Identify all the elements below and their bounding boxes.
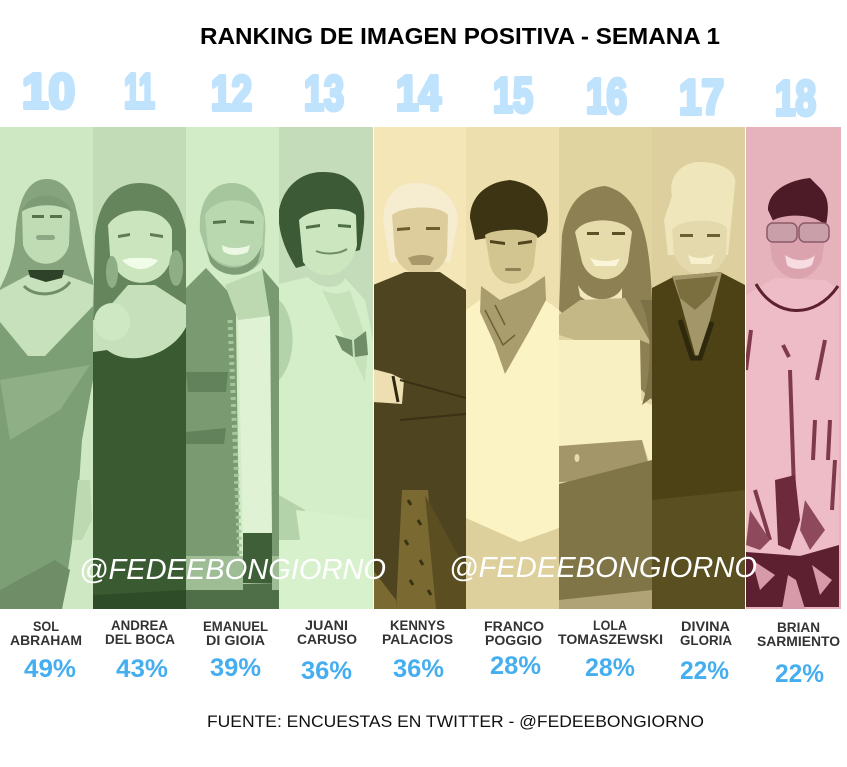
source footer: FUENTE: ENCUESTAS EN TWITTER - @FEDEEBONGIORNO	[207, 712, 704, 731]
participant names: TOMASZEWSKI	[558, 632, 663, 647]
panel: Lola Tomaszewski portrait	[559, 127, 655, 609]
percentages: 28%	[585, 654, 635, 682]
percentages: 36%	[301, 657, 352, 685]
rank numbers: 16	[586, 70, 627, 124]
panel: Emanuel di Gioia portrait	[186, 127, 279, 609]
participant names: SARMIENTO	[757, 634, 840, 649]
participant names: GLORIA	[680, 633, 732, 648]
participant names: DEL BOCA	[105, 632, 175, 647]
title: RANKING DE IMAGEN POSITIVA - SEMANA 1	[200, 23, 720, 49]
participant names: DIVINA	[681, 619, 730, 634]
rank numbers: 13	[304, 67, 344, 121]
watermark left: @FEDEEBONGIORNO	[79, 554, 386, 586]
panel: Divina Gloria portrait	[652, 127, 745, 609]
percentages: 22%	[680, 657, 729, 685]
percentages: 39%	[210, 654, 261, 682]
percentages: 36%	[393, 655, 444, 683]
rank numbers: 18	[775, 72, 816, 126]
participant names: PALACIOS	[382, 632, 453, 647]
panel: Kennys Palacios portrait	[373, 127, 466, 609]
participant names: EMANUEL	[203, 619, 268, 634]
watermark right: @FEDEEBONGIORNO	[449, 552, 757, 584]
panel: Franco Poggio portrait	[466, 127, 559, 609]
participant names: JUANI	[305, 618, 348, 633]
participant names: DI GIOIA	[206, 633, 265, 648]
icon: butterfly tattoo	[335, 331, 368, 357]
participant names: ANDREA	[111, 618, 168, 633]
rank numbers	[22, 65, 816, 126]
rank numbers: 14	[396, 67, 441, 121]
participant names: CARUSO	[297, 632, 357, 647]
participant names: FRANCO	[484, 619, 544, 634]
panel: Andrea del Boca portrait	[93, 127, 186, 609]
percentages: 43%	[116, 655, 168, 683]
participant names: ABRAHAM	[10, 633, 82, 648]
rank numbers: 12	[211, 67, 252, 121]
percentages: 28%	[490, 652, 541, 680]
rank numbers: 15	[493, 69, 533, 123]
participant names	[10, 618, 840, 649]
participant names: BRIAN	[777, 620, 820, 635]
panel: Sol Abraham portrait	[0, 127, 93, 609]
rank numbers: 10	[22, 65, 75, 119]
rank numbers: 11	[124, 65, 155, 119]
participant names: KENNYS	[390, 618, 445, 633]
rank numbers: 17	[679, 71, 724, 125]
panel: Brian Sarmiento portrait	[746, 127, 841, 609]
participant names: POGGIO	[485, 633, 542, 648]
panel: Juani Caruso portrait	[279, 127, 373, 609]
percentages	[24, 652, 824, 688]
percentages: 49%	[24, 655, 76, 683]
percentages: 22%	[775, 660, 824, 688]
participant names: LOLA	[593, 618, 627, 633]
participant names: SOL	[33, 619, 59, 634]
